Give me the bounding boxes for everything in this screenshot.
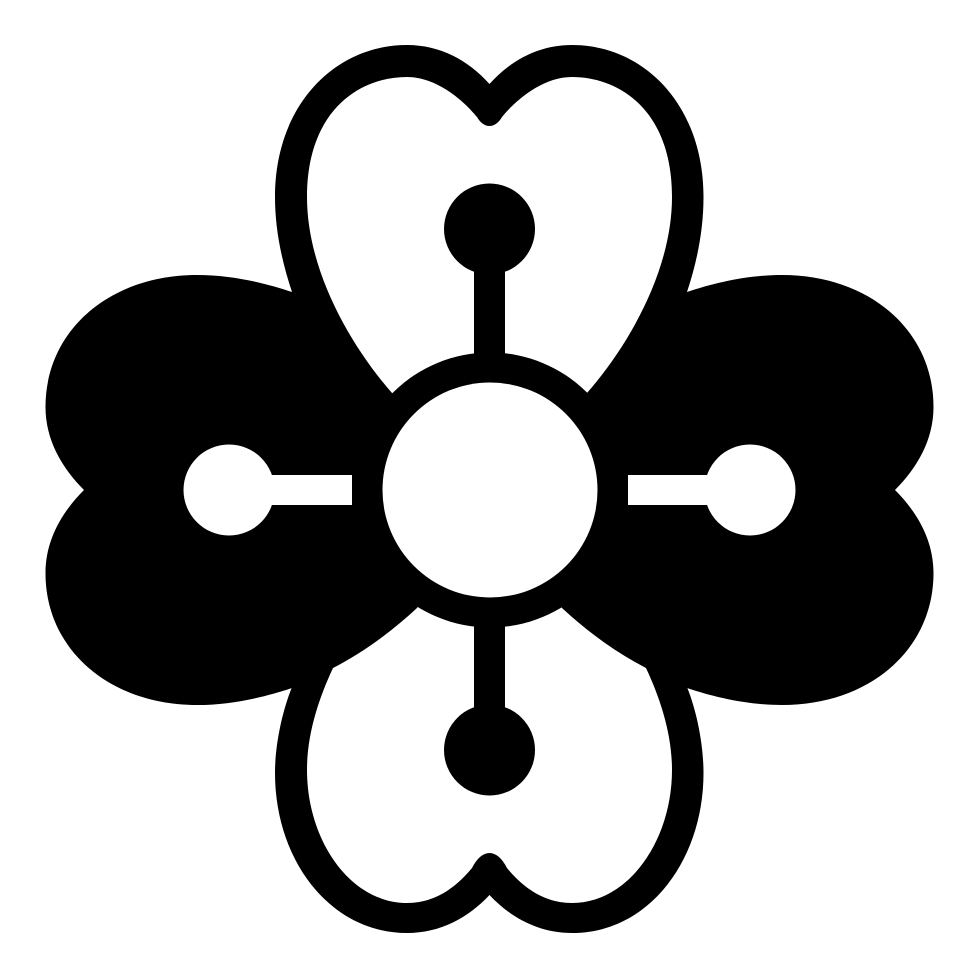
left petal: solid black <box>46 275 489 705</box>
center ring <box>352 352 628 628</box>
top petal: outlined <box>275 45 704 490</box>
bottom petal: outlined <box>275 490 704 933</box>
right petal: solid black <box>489 275 934 705</box>
